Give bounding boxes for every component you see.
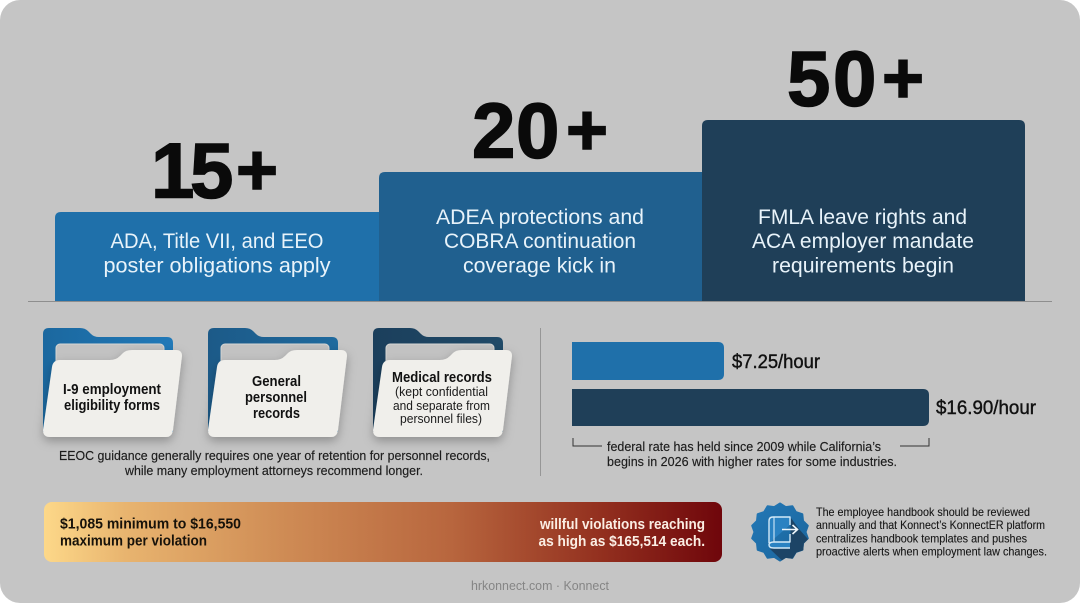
handbook text: annually and that Konnect’s KonnectER platform — [816, 518, 1045, 532]
folder: I-9 forms: I-9 employment — [63, 382, 161, 398]
folder: general personnel records: General — [252, 374, 301, 390]
step: 50+ employees: requirements begin — [772, 254, 954, 278]
step: 15+ employees — [55, 126, 379, 301]
step: 15+ employees: ADA, Title VII, and EEO — [110, 229, 324, 253]
step: 15+ employees: + — [236, 130, 278, 210]
footer source: hrkonnect.com · Konnect — [471, 578, 609, 593]
handbook text — [816, 505, 1047, 558]
step: 15+ employees: 15 — [151, 126, 233, 214]
retention note: EEOC guidance generally requires one year of retention for personnel records, — [59, 448, 490, 463]
step: 50+ employees: FMLA leave rights and — [758, 205, 967, 229]
panel: record retention folders — [43, 328, 512, 478]
step: 15+ employees: poster obligations apply — [104, 254, 331, 278]
step: 20+ employees — [379, 86, 702, 301]
handbook text: The employee handbook should be reviewed — [816, 505, 1030, 519]
panel: penalty gradient bar: as high as $165,514 each. — [538, 534, 705, 550]
bar: federal minimum wage: $7.25/hour — [732, 352, 821, 373]
folder: medical records: Medical records — [392, 370, 492, 386]
step: 50+ employees: + — [882, 38, 924, 118]
folder: medical records — [373, 328, 512, 437]
folder: I-9 forms: eligibility forms — [64, 398, 160, 414]
folder: medical records: (kept confidential — [395, 384, 488, 399]
bracket and wage note: federal rate has held since 2009 while California’s — [607, 439, 881, 454]
panel: minimum wage bar chart — [572, 342, 1037, 469]
folder: general personnel records — [208, 328, 347, 437]
folder: medical records: personnel files) — [400, 411, 482, 426]
step: 20+ employees: ADEA protections and — [436, 205, 644, 229]
icon: handbook badge — [751, 502, 809, 562]
folder: general personnel records: personnel — [245, 390, 307, 406]
panel: headcount staircase — [55, 34, 1025, 301]
bar: California minimum wage — [572, 389, 1037, 426]
handbook text: centralizes handbook templates and pushes — [816, 532, 1027, 546]
step: 50+ employees: ACA employer mandate — [752, 229, 974, 253]
panel: penalty gradient bar: maximum per violation — [60, 534, 207, 550]
bracket and wage note — [573, 438, 929, 469]
panel: penalty gradient bar: $1,085 minimum to $16,550 — [60, 516, 241, 532]
step: 20+ employees: coverage kick in — [463, 254, 616, 278]
panel: penalty gradient bar — [44, 502, 722, 562]
folder: medical records: and separate from — [393, 398, 490, 413]
bar: California minimum wage: $16.90/hour — [936, 398, 1037, 419]
handbook text: proactive alerts when employment law changes. — [816, 544, 1047, 558]
bracket and wage note: begins in 2026 with higher rates for some industries. — [607, 454, 897, 469]
folder: general personnel records: records — [253, 406, 300, 422]
panel: penalty gradient bar: willful violations reaching — [539, 517, 705, 533]
step: 50+ employees — [702, 34, 1025, 301]
step: 20+ employees: COBRA continuation — [444, 229, 636, 253]
bar: federal minimum wage — [572, 342, 821, 380]
panel: handbook callout — [752, 504, 1047, 568]
step: 50+ employees: 50 — [787, 34, 876, 122]
folder: I-9 forms — [43, 328, 182, 437]
retention note — [59, 448, 490, 478]
step: 20+ employees: 20 — [472, 86, 559, 174]
retention note: while many employment attorneys recommend longer. — [124, 463, 423, 478]
step: 20+ employees: + — [566, 90, 608, 170]
